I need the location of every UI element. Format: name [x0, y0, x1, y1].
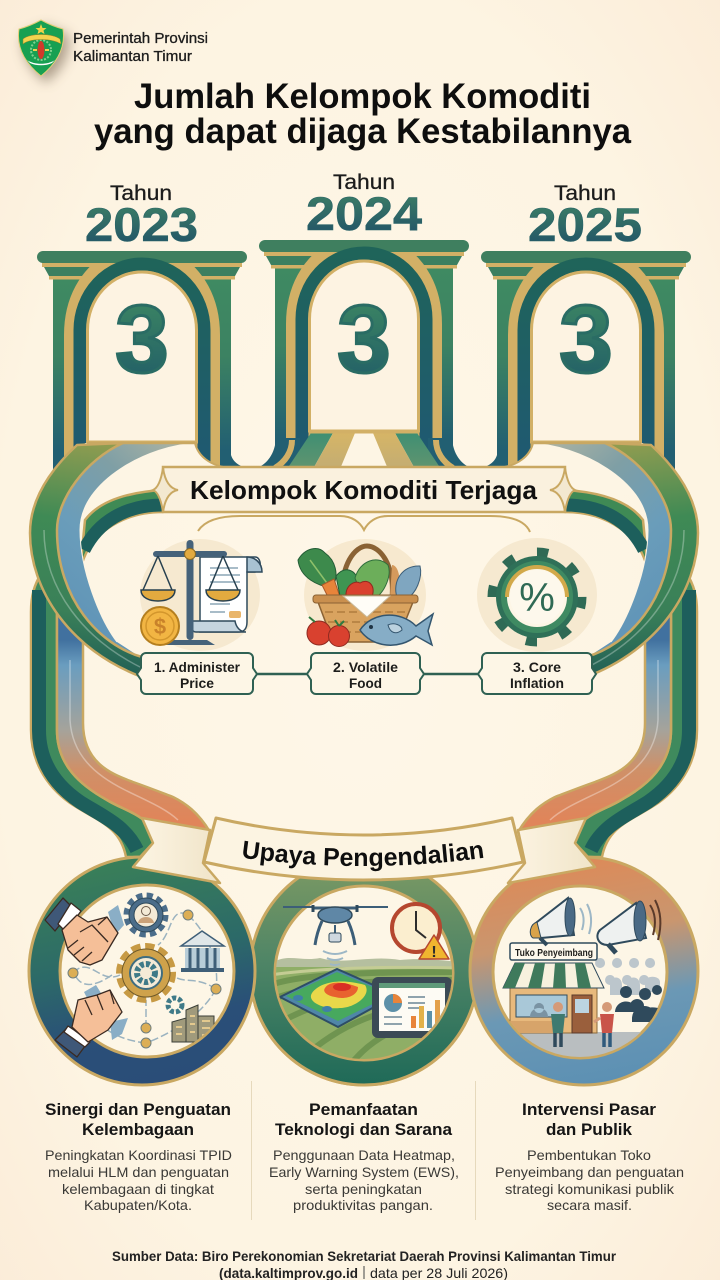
text block: Intervensi Pasar: Penyeimbang dan penguatan — [495, 1164, 684, 1180]
icon: percent gear — [477, 538, 597, 652]
ribbon tail: left — [133, 818, 220, 883]
text block: Pemanfaatan Teknologi: Early Warning System (EWS), — [269, 1164, 459, 1180]
header text: institution — [73, 31, 208, 65]
ring: middle, base — [250, 857, 478, 1085]
arch feet and centre arch base — [60, 432, 668, 495]
label: Core Inflation: 3. Core — [513, 659, 561, 675]
title: Jumlah Kelompok Komoditi — [134, 77, 591, 116]
arch: 2025 — [481, 251, 691, 480]
text block: Sinergi dan Penguatan: kelembagaan di tingkat — [62, 1181, 214, 1197]
panel: teknologi illustration — [270, 886, 460, 1065]
text block: Intervensi Pasar: Pembentukan Toko — [527, 1147, 651, 1163]
year heading: 2024: 2024 — [306, 187, 422, 240]
year heading: 2023: 2023 — [85, 198, 198, 251]
icon: scales, coin and document: $ — [154, 614, 166, 639]
text block: Intervensi Pasar — [495, 1100, 684, 1213]
source footer: Sumber Data: Biro Perekonomian Sekretariat Daerah Provinsi Kalimantan Timur — [112, 1248, 617, 1264]
ring: right — [470, 857, 698, 1085]
number: 2024: 3 — [337, 286, 391, 393]
label: Core Inflation — [478, 653, 596, 694]
icon: percent gear: % — [519, 576, 555, 620]
text block: Sinergi dan Penguatan: Kelembagaan — [82, 1120, 194, 1139]
text block: Intervensi Pasar: secara masif. — [547, 1197, 632, 1213]
text block: Sinergi dan Penguatan: Peningkatan Koordinasi TPID — [45, 1147, 232, 1163]
banner heading: Kelompok Komoditi Terjaga — [190, 475, 538, 505]
text block: Pemanfaatan Teknologi: produktivitas pangan. — [293, 1197, 433, 1213]
label: Administer Price: Price — [180, 675, 214, 691]
arch: 2024 — [259, 240, 469, 469]
ribbon tail: right — [508, 818, 595, 883]
title: yang dapat dijaga Kestabilannya — [94, 112, 632, 151]
clock with warning — [392, 904, 449, 961]
text block: Pemanfaatan Teknologi: serta peningkatan — [305, 1181, 422, 1197]
year heading: 2024: Tahun — [333, 171, 395, 194]
header text: institution: Kalimantan Timur — [73, 49, 192, 65]
source footer — [112, 1248, 617, 1280]
header text: institution: Pemerintah Provinsi — [73, 31, 208, 47]
big loop ribbon: left — [30, 443, 197, 677]
ribbon banner: Upaya Pengendalian: Upaya Pengendalian — [243, 840, 484, 872]
year heading: 2025: 2025 — [528, 198, 642, 251]
text block: Pemanfaatan Teknologi: Teknologi dan Sarana — [275, 1120, 453, 1139]
clock with warning: ! — [431, 944, 437, 961]
ribbon banner: Upaya Pengendalian — [204, 816, 524, 882]
text block: Intervensi Pasar: Intervensi Pasar — [522, 1100, 656, 1119]
label: Administer Price — [137, 653, 257, 694]
column dividers — [252, 1081, 476, 1220]
big loop ribbon: right — [531, 443, 698, 677]
text block: Pemanfaatan Teknologi — [269, 1100, 459, 1213]
icon: food basket — [298, 539, 433, 651]
year heading: 2025: Tahun — [554, 182, 616, 205]
text block: Pemanfaatan Teknologi: Pemanfaatan — [309, 1100, 418, 1119]
title — [94, 77, 632, 151]
text block: Intervensi Pasar: dan Publik — [546, 1120, 633, 1139]
text block: Sinergi dan Penguatan: melalui HLM dan penguatan — [48, 1164, 229, 1180]
text block: Sinergi dan Penguatan: Kabupaten/Kota. — [84, 1197, 192, 1213]
number: 2023: 3 — [115, 286, 169, 393]
panel: kelembagaan illustration — [45, 885, 234, 1057]
number: 2025: 3 — [559, 286, 613, 393]
year heading: 2024 — [306, 171, 422, 240]
text block: Sinergi dan Penguatan — [45, 1100, 232, 1213]
hands and sleeves — [45, 898, 122, 1057]
arch: 2023 — [37, 251, 247, 480]
panel: pasar dan publik illustration: Tuko Penyeimbang — [515, 947, 593, 959]
text block: Intervensi Pasar: strategi komunikasi publik — [505, 1181, 675, 1197]
lower frame ribbon: left — [31, 572, 210, 857]
label: Core Inflation: Inflation — [510, 675, 564, 691]
text block: Sinergi dan Penguatan: Sinergi dan Penguatan — [45, 1100, 231, 1119]
ring: middle, overlapping lower half — [254, 1005, 474, 1086]
label: Administer Price: 1. Administer — [154, 659, 241, 675]
bracket under banner — [198, 516, 530, 532]
label: Volatile Food: 2. Volatile — [333, 659, 398, 675]
label: Volatile Food — [307, 653, 424, 694]
connector lines between labels — [252, 673, 483, 675]
lower frame ribbon: right — [518, 572, 697, 857]
drone — [283, 905, 388, 965]
icon: scales, coin and document — [140, 539, 262, 651]
text block: Pemanfaatan Teknologi: Penggunaan Data Heatmap, — [273, 1147, 455, 1163]
year heading: 2023: Tahun — [110, 182, 172, 205]
logo — [18, 20, 64, 76]
panel: pasar dan publik illustration — [490, 886, 670, 1062]
label: Volatile Food: Food — [349, 675, 382, 691]
section banner: Kelompok Komoditi Terjaga — [153, 467, 575, 512]
megaphones — [530, 898, 660, 953]
ring: left — [29, 857, 255, 1085]
